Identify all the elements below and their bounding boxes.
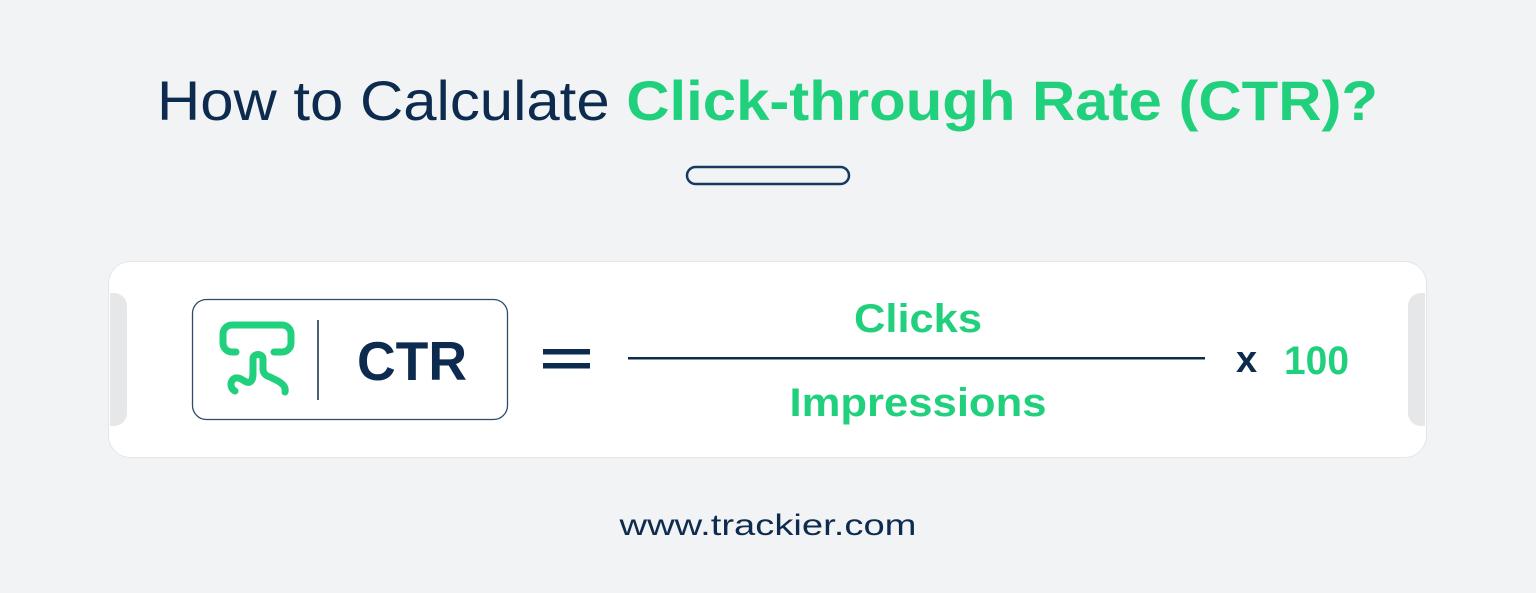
multiplier: 100 (1284, 339, 1349, 383)
fraction (628, 297, 1205, 425)
footer url: www.trackier.com (618, 509, 916, 542)
title: How to Calculate Click-through Rate (CTR)? (157, 69, 1378, 132)
multiplier: x (1236, 339, 1257, 381)
fraction: Impressions (790, 381, 1046, 425)
CTR box (192, 300, 508, 420)
panel: formula card (108, 262, 1426, 458)
icon: click hand (223, 325, 291, 392)
equals sign (543, 349, 590, 368)
decorative pill (687, 167, 849, 184)
fraction: Clicks (854, 297, 982, 341)
CTR box: CTR (357, 330, 467, 392)
multiplier (1236, 339, 1349, 383)
